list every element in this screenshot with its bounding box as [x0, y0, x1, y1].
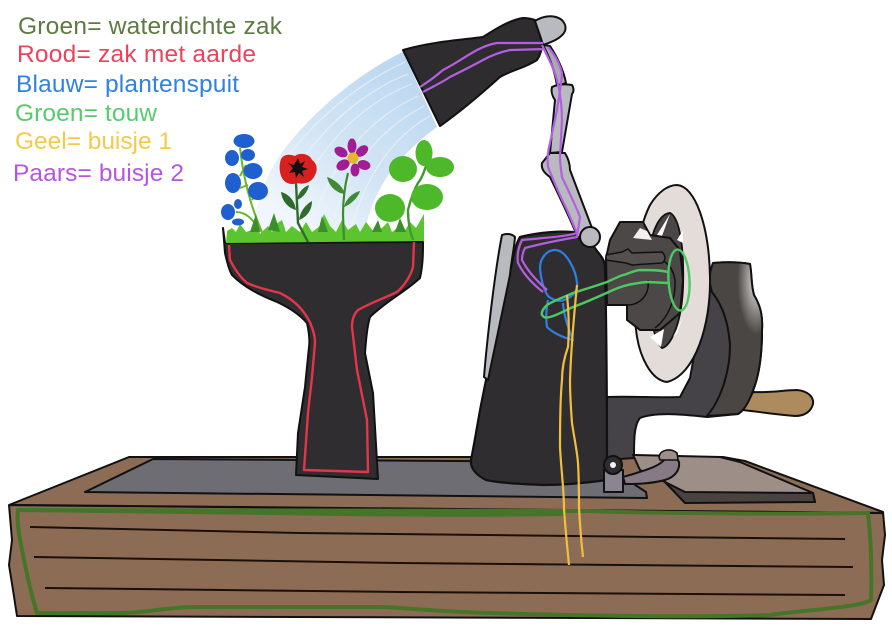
crank handle	[743, 390, 813, 416]
blue flower	[221, 134, 268, 232]
ball joint	[580, 227, 600, 247]
green plant	[375, 140, 454, 240]
water spray	[253, 52, 437, 236]
green rope	[542, 249, 691, 318]
flexible arm	[542, 45, 600, 247]
purple flower	[327, 138, 372, 240]
machine body	[471, 185, 815, 503]
grass	[226, 214, 424, 243]
hub	[606, 222, 683, 330]
nozzle	[535, 16, 566, 45]
yellow tube 1	[560, 285, 583, 565]
red outline: bag with soil	[229, 242, 414, 472]
crank lump	[707, 262, 762, 416]
blue outline: plant sprayer	[540, 250, 577, 340]
green outline: waterproof bag	[18, 510, 871, 616]
legend: rope: Groen= touw	[15, 100, 157, 127]
clamp lever	[623, 457, 679, 484]
hub notch	[633, 228, 652, 240]
legend	[13, 13, 283, 187]
flower pot	[223, 228, 423, 479]
wheel ring	[634, 185, 710, 382]
purple tube 2 inside machine	[518, 45, 580, 292]
grey side plate	[484, 234, 515, 380]
plank lines	[30, 527, 853, 595]
hub bolt	[606, 249, 665, 265]
spray bottle with purple tube	[403, 16, 566, 126]
main body	[471, 232, 607, 485]
legend: bag with soil: Rood= zak met aarde	[17, 41, 256, 68]
wooden base	[9, 457, 885, 619]
legend: tube 2: Paars= buisje 2	[13, 160, 184, 187]
clamp post	[604, 470, 623, 492]
red poppy	[280, 154, 317, 242]
rear arm and crank	[607, 262, 762, 460]
legend: tube 1: Geel= buisje 1	[15, 128, 172, 155]
right plate	[633, 455, 815, 502]
legend: waterproof bag: Groen= waterdichte zak	[18, 13, 283, 40]
plants	[221, 134, 454, 243]
dark grass tufts	[250, 213, 406, 232]
wheel spokes	[648, 213, 683, 348]
legend: plant sprayer: Blauw= plantenspuit	[16, 71, 239, 98]
rope loop	[667, 249, 691, 311]
grey mat	[85, 459, 647, 498]
